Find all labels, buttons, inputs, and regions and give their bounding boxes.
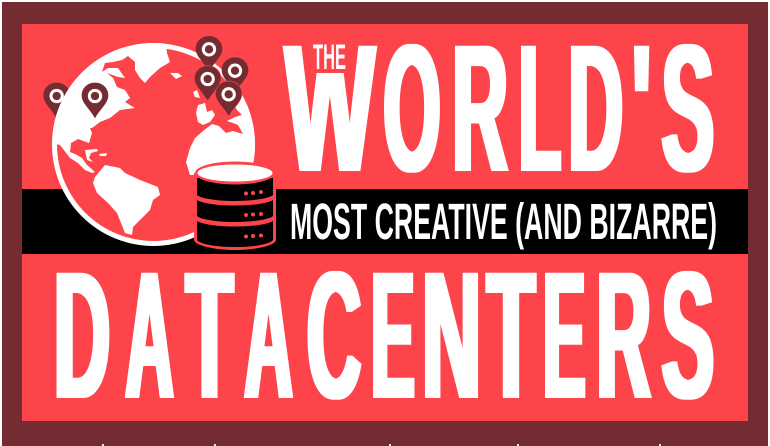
heading: DATACENTERS: D — [54, 233, 110, 437]
heading: DATACENTERS: C — [307, 233, 361, 437]
north america — [52, 43, 170, 173]
heading: DATACENTERS: T — [186, 233, 233, 437]
heading: DATACENTERS: R — [596, 233, 651, 437]
heading: DATACENTERS: E — [371, 233, 414, 437]
icon: pin behind globe — [43, 83, 70, 118]
caribbean — [85, 149, 98, 162]
heading: WORLD'S: O — [384, 6, 440, 210]
icon: pin 1 — [222, 57, 248, 93]
heading: DATACENTERS: T — [487, 233, 535, 437]
cropped text tops at bottom edge — [102, 444, 661, 446]
heading: WORLD'S — [285, 6, 714, 210]
scandinavia — [193, 90, 200, 98]
heading: DATACENTERS: A — [244, 233, 292, 437]
icon: pin 3 — [194, 66, 221, 101]
heading: WORLD'S: D — [568, 6, 623, 210]
icon: pin 4 — [215, 81, 242, 117]
black band — [22, 189, 748, 254]
heading: WORLD'S: R — [452, 6, 508, 210]
heading: WORLD'S: L — [519, 6, 561, 210]
europe — [196, 103, 215, 125]
heading: DATACENTERS: E — [543, 233, 585, 437]
heading: DATACENTERS: N — [422, 233, 481, 437]
africa and asia — [186, 95, 255, 175]
heading: DATACENTERS — [54, 233, 714, 437]
south america — [93, 165, 160, 235]
text: THE — [313, 38, 346, 77]
icon: pin 5 — [82, 83, 108, 118]
icon: pin 2 — [196, 36, 222, 72]
heading: WORLD'S: W — [285, 6, 375, 210]
heading: DATACENTERS: A — [126, 233, 174, 437]
heading: WORLD'S: ' — [632, 6, 651, 210]
iceland — [170, 73, 182, 79]
icon: globe — [52, 43, 255, 246]
notch behind THE — [312, 40, 347, 73]
icon: database stack — [194, 162, 276, 250]
